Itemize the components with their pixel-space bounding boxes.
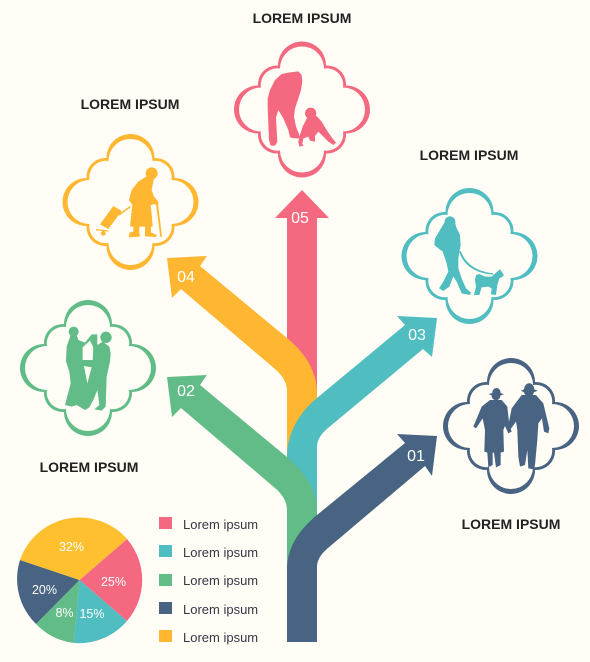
slice 32% <box>20 517 127 580</box>
panel: green dancing couple <box>20 300 156 436</box>
arrow 01: 01 <box>407 448 425 465</box>
icon: elderly couple holding hands <box>473 383 549 469</box>
arrow 05 <box>275 190 329 420</box>
legend item navy: Lorem ipsum <box>183 602 258 617</box>
heading upper left: LOREM IPSUM <box>81 96 179 112</box>
cloud frame <box>234 42 370 178</box>
pie value labels <box>32 540 126 621</box>
tree of arrows <box>167 190 437 642</box>
arrow 04: 04 <box>177 269 195 286</box>
heading top: LOREM IPSUM <box>253 10 351 26</box>
icon: adult and toddler <box>268 71 336 147</box>
arrow 04 <box>167 256 317 470</box>
icon: dancing couple <box>65 327 112 411</box>
arrow 02: 02 <box>177 383 195 400</box>
pie value labels: 20% <box>32 583 57 597</box>
heading lower left: LOREM IPSUM <box>40 459 138 475</box>
arrow 01 <box>287 434 437 642</box>
pie value labels: 25% <box>101 575 126 589</box>
cloud frame <box>62 134 198 270</box>
icon: elderly woman with trolley <box>96 167 162 237</box>
icon: man walking dog <box>434 216 504 295</box>
slice 15% <box>74 580 127 643</box>
cloud frame <box>20 300 156 436</box>
heading lower right: LOREM IPSUM <box>462 516 560 532</box>
arrow 02 <box>167 375 317 590</box>
pie value labels: 32% <box>59 540 84 554</box>
legend <box>159 517 258 645</box>
cloud frame <box>402 188 538 324</box>
panel: pink adult and child <box>234 42 370 178</box>
arrow 03 <box>287 316 437 530</box>
arrow 03: 03 <box>408 327 426 344</box>
arrow 05: 05 <box>291 210 309 227</box>
pie value labels: 15% <box>79 607 105 621</box>
panel: teal man walking dog <box>402 188 538 324</box>
heading upper right: LOREM IPSUM <box>420 147 518 163</box>
legend item yellow: Lorem ipsum <box>183 630 258 645</box>
panel: yellow woman with luggage <box>62 134 198 270</box>
legend item pink: Lorem ipsum <box>183 517 258 532</box>
panel: navy elderly couple <box>443 358 579 494</box>
legend item teal: Lorem ipsum <box>183 545 258 560</box>
legend item green: Lorem ipsum <box>183 573 258 588</box>
cloud frame <box>443 358 579 494</box>
pie value labels: 8% <box>55 606 74 620</box>
slice 8% <box>36 580 80 643</box>
slice 20% <box>17 560 80 624</box>
pie chart <box>17 517 142 643</box>
slice 25% <box>80 539 142 621</box>
